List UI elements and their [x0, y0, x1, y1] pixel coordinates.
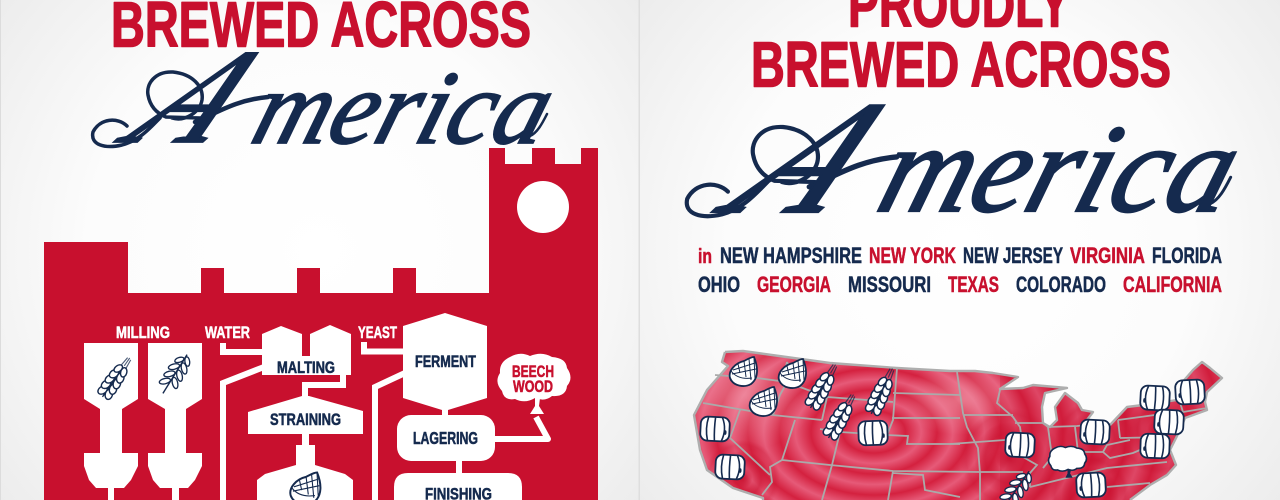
icon: wheat ear	[95, 353, 137, 403]
heading: right poster	[751, 0, 1171, 100]
icon group: hops on map	[730, 357, 806, 416]
text block: list of states: NEW JERSEY	[963, 243, 1063, 268]
pipe: boil to ferment	[375, 373, 405, 500]
pipe: lagering to finishing	[456, 460, 462, 474]
tank: ferment: FERMENT	[415, 353, 476, 371]
heading: right script America: merica	[865, 100, 1256, 239]
label: water: WATER	[205, 324, 250, 342]
kettle: hops	[257, 433, 353, 500]
icon group: barrels on map	[700, 379, 1205, 498]
tower window	[517, 181, 569, 233]
icon: beech tree on map	[1049, 446, 1086, 478]
pipe: yeast feed	[364, 342, 405, 352]
icon: hop cone	[290, 472, 320, 500]
tank: lagering	[397, 415, 495, 461]
pipe: beech wood to lagering	[493, 417, 548, 439]
panel: right poster background	[640, 0, 1280, 500]
panel: left poster background	[0, 0, 639, 500]
tank: finishing	[394, 473, 522, 500]
hopper: barley	[148, 343, 202, 500]
tank: lagering: LAGERING	[413, 428, 478, 448]
text block: list of states: NEW HAMPSHIRE	[720, 243, 862, 268]
text block: list of states	[698, 243, 1222, 297]
text block: list of states: OHIO	[698, 272, 740, 297]
text block: list of states: FLORIDA	[1152, 243, 1222, 268]
pipe: water feed	[223, 343, 264, 352]
icon: beech tree	[497, 354, 570, 414]
flourish: left script swash	[93, 72, 547, 146]
label: milling: MILLING	[116, 324, 170, 342]
tank: malting	[262, 325, 351, 377]
text block: list of states: MISSOURI	[848, 272, 931, 297]
pipe: malting to straining	[305, 372, 343, 398]
text block: list of states: COLORADO	[1016, 272, 1106, 297]
icon: beech tree: BEECH	[512, 363, 554, 381]
icon: barley on map	[994, 465, 1038, 500]
pipe: malting to boil	[223, 367, 264, 500]
hopper: wheat	[84, 343, 138, 500]
text block: list of states: TEXAS	[948, 272, 999, 297]
icon: barley sprig	[154, 349, 196, 399]
text block: list of states: NEW YORK	[869, 243, 956, 268]
heading: left script America: A	[94, 23, 308, 172]
map: United States with ripple fill	[692, 350, 1224, 500]
flourish: right script swash	[687, 127, 1231, 216]
text block: list of states: VIRGINIA	[1070, 243, 1145, 268]
heading: right script America	[689, 68, 1256, 247]
heading: left script America: merica	[241, 49, 568, 166]
tank: straining	[248, 396, 363, 434]
icon group: wheat on map	[802, 360, 901, 443]
tank: straining: STRAINING	[270, 411, 341, 429]
label: yeast: YEAST	[358, 324, 397, 342]
tank: malting: MALTING	[277, 359, 335, 377]
icon: beech tree: WOOD	[513, 378, 553, 396]
state borders	[703, 362, 1207, 500]
heading: left script America	[94, 23, 568, 172]
panel: red castle brewery	[44, 148, 598, 500]
text block: list of states: CALIFORNIA	[1123, 272, 1222, 297]
text block: list of states: in	[698, 246, 712, 268]
text block: list of states: GEORGIA	[757, 272, 831, 297]
tank: ferment	[403, 313, 487, 416]
heading: right script America: A	[689, 68, 946, 247]
